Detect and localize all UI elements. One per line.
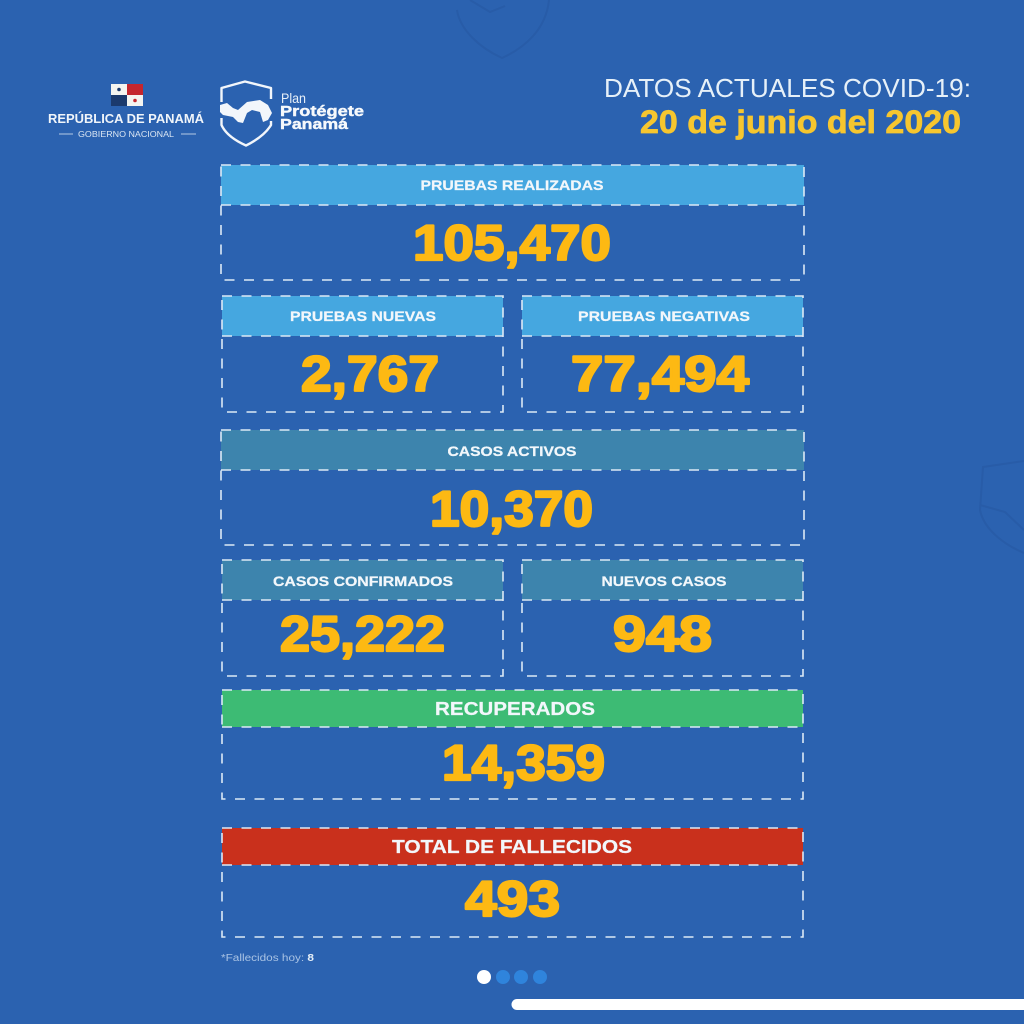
logo: República de Panamá <box>48 84 204 139</box>
icon: shield with isthmus <box>220 82 272 146</box>
value: 2,767 <box>301 346 439 402</box>
logo: Plan Protégete Panamá: Protégete <box>280 104 364 120</box>
panel: pruebas nuevas <box>222 296 503 412</box>
panel: nuevos casos <box>522 560 803 676</box>
value: 948 <box>613 606 712 662</box>
icon: Panama flag <box>111 84 143 106</box>
panel: pruebas negativas <box>522 296 803 412</box>
logo: Plan Protégete Panamá: Panamá <box>280 117 349 133</box>
heading: PRUEBAS NEGATIVAS <box>578 308 750 324</box>
value: 105,470 <box>413 215 611 271</box>
heading: CASOS CONFIRMADOS <box>273 573 453 589</box>
panel: pruebas realizadas <box>221 165 804 280</box>
panel: casos activos <box>221 430 804 545</box>
watermark shield right <box>980 461 1024 553</box>
value: 25,222 <box>280 606 445 662</box>
value: 77,494 <box>571 346 749 402</box>
heading: CASOS ACTIVOS <box>448 443 576 459</box>
value: 493 <box>465 871 560 927</box>
title: DATOS ACTUALES COVID-19: <box>604 73 971 103</box>
panel: casos confirmados <box>222 560 503 676</box>
heading: NUEVOS CASOS <box>602 573 726 589</box>
heading: PRUEBAS NUEVAS <box>290 308 436 324</box>
heading: TOTAL DE FALLECIDOS <box>392 837 632 857</box>
pagination dots <box>477 970 547 984</box>
government label: GOBIERNO NACIONAL <box>78 130 175 139</box>
value: 10,370 <box>430 481 593 537</box>
heading: PRUEBAS REALIZADAS <box>420 177 604 193</box>
republic name: REPÚBLICA DE PANAMÁ <box>48 111 204 126</box>
panel: recuperados <box>222 690 803 799</box>
value: 14,359 <box>442 735 605 791</box>
watermark shield top <box>457 0 549 58</box>
logo: Plan Protégete Panamá <box>220 82 364 146</box>
date: 20 de junio del 2020 <box>640 104 961 140</box>
logo text: Plan <box>281 90 306 106</box>
panel: total de fallecidos <box>222 828 803 937</box>
footnote: *Fallecidos hoy: 8 <box>221 953 315 964</box>
progress bar <box>512 999 1024 1010</box>
heading: RECUPERADOS <box>435 699 595 719</box>
